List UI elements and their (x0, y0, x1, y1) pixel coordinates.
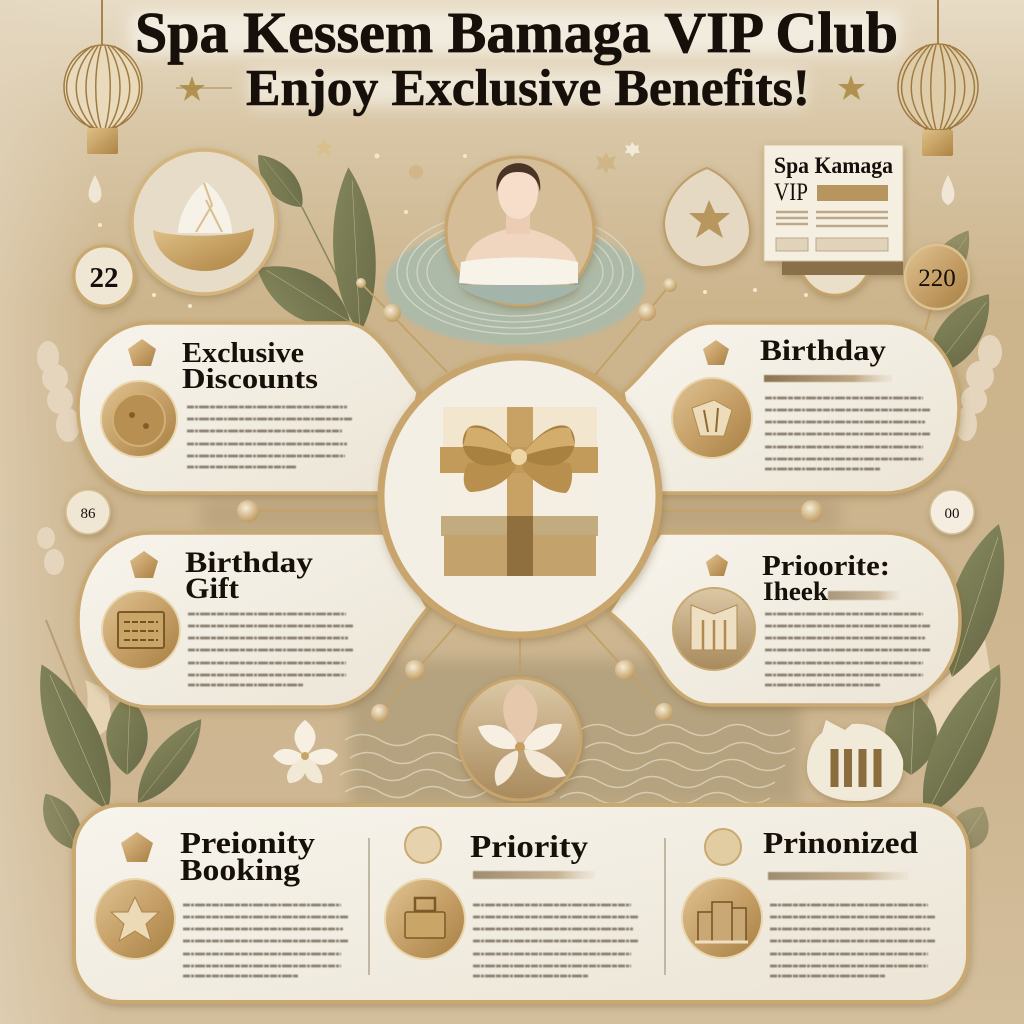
VIP card: Spa Kamaga (774, 153, 893, 178)
round icon (102, 591, 180, 669)
blurred subheading (768, 872, 908, 880)
round icon (672, 378, 752, 458)
benefit: priority (385, 827, 638, 976)
VIP card: VIP (774, 179, 808, 206)
foliage: lower leaves (20, 517, 1022, 859)
badge: 220 (905, 245, 969, 330)
small badge (128, 339, 156, 366)
heading: Prinonized (763, 825, 918, 860)
icon: flower medallion (459, 678, 581, 800)
panel: exclusive discounts (78, 323, 418, 493)
heading: Booking (180, 852, 301, 887)
icon: spa guest portrait (446, 157, 594, 305)
water waves (340, 724, 795, 804)
blurred subheading (473, 871, 595, 879)
heading: Gift (185, 572, 239, 605)
connectors and beads (237, 278, 823, 722)
badge: right small coin: 00 (944, 506, 960, 522)
small badge (703, 340, 729, 365)
badge: left small coin (66, 490, 110, 534)
badge: 22: 22 (90, 262, 118, 294)
badge: right small coin (930, 490, 974, 534)
heading: Prioorite: (762, 550, 890, 582)
panel: bottom benefits (74, 805, 968, 1002)
round icon (673, 588, 755, 670)
text block (187, 407, 352, 467)
round icon (385, 879, 465, 959)
title: Spa Kessem Bamaga VIP Club (135, 0, 898, 65)
foliage: side plumes (37, 335, 1002, 745)
heading: Exclusive (182, 337, 304, 369)
blurred subheading: Iheek (763, 577, 829, 606)
icon: left lantern (64, 0, 142, 154)
icon: white drops and sparkles (89, 152, 954, 308)
blurred subheading (763, 577, 900, 606)
small badge (130, 551, 158, 578)
badge: left small coin: 86 (80, 506, 96, 522)
icon: gift box (440, 407, 598, 576)
panel: priorite (609, 533, 960, 705)
round icon (682, 878, 762, 958)
title (130, 0, 900, 117)
heading: Priority (470, 828, 588, 864)
badge: 22 (74, 246, 134, 306)
heading: Birthday (760, 334, 886, 367)
text block (183, 905, 348, 976)
heading: Preionity (180, 825, 316, 860)
centre medallion: gift box (381, 357, 659, 635)
icon: white flower (273, 720, 338, 783)
round icon (95, 879, 175, 959)
icon: stone with star (664, 168, 750, 267)
foliage: upper leaves (246, 146, 1005, 387)
title: Enjoy Exclusive Benefits! (246, 60, 810, 117)
text block (765, 614, 930, 685)
heading: Birthday (185, 546, 313, 579)
decorative stars beside subtitle (176, 75, 865, 157)
text block (765, 398, 930, 469)
blurred subheading (764, 375, 892, 382)
benefit: preionity booking (95, 825, 348, 976)
text block (188, 614, 353, 685)
panel: birthday (623, 323, 959, 493)
round icon (101, 381, 177, 457)
heading: Discounts (182, 363, 318, 395)
icon: right lantern (898, 0, 978, 156)
icon: bowl medallion (132, 150, 276, 294)
water pool behind portrait (385, 210, 645, 345)
panel: birthday gift (78, 533, 428, 707)
text block (770, 905, 935, 976)
small badge (706, 554, 728, 576)
badge: 220: 220 (918, 265, 956, 292)
benefit: prinonized (682, 825, 935, 976)
VIP card (764, 145, 903, 295)
text block (473, 905, 638, 976)
icon: building blob (807, 720, 903, 801)
